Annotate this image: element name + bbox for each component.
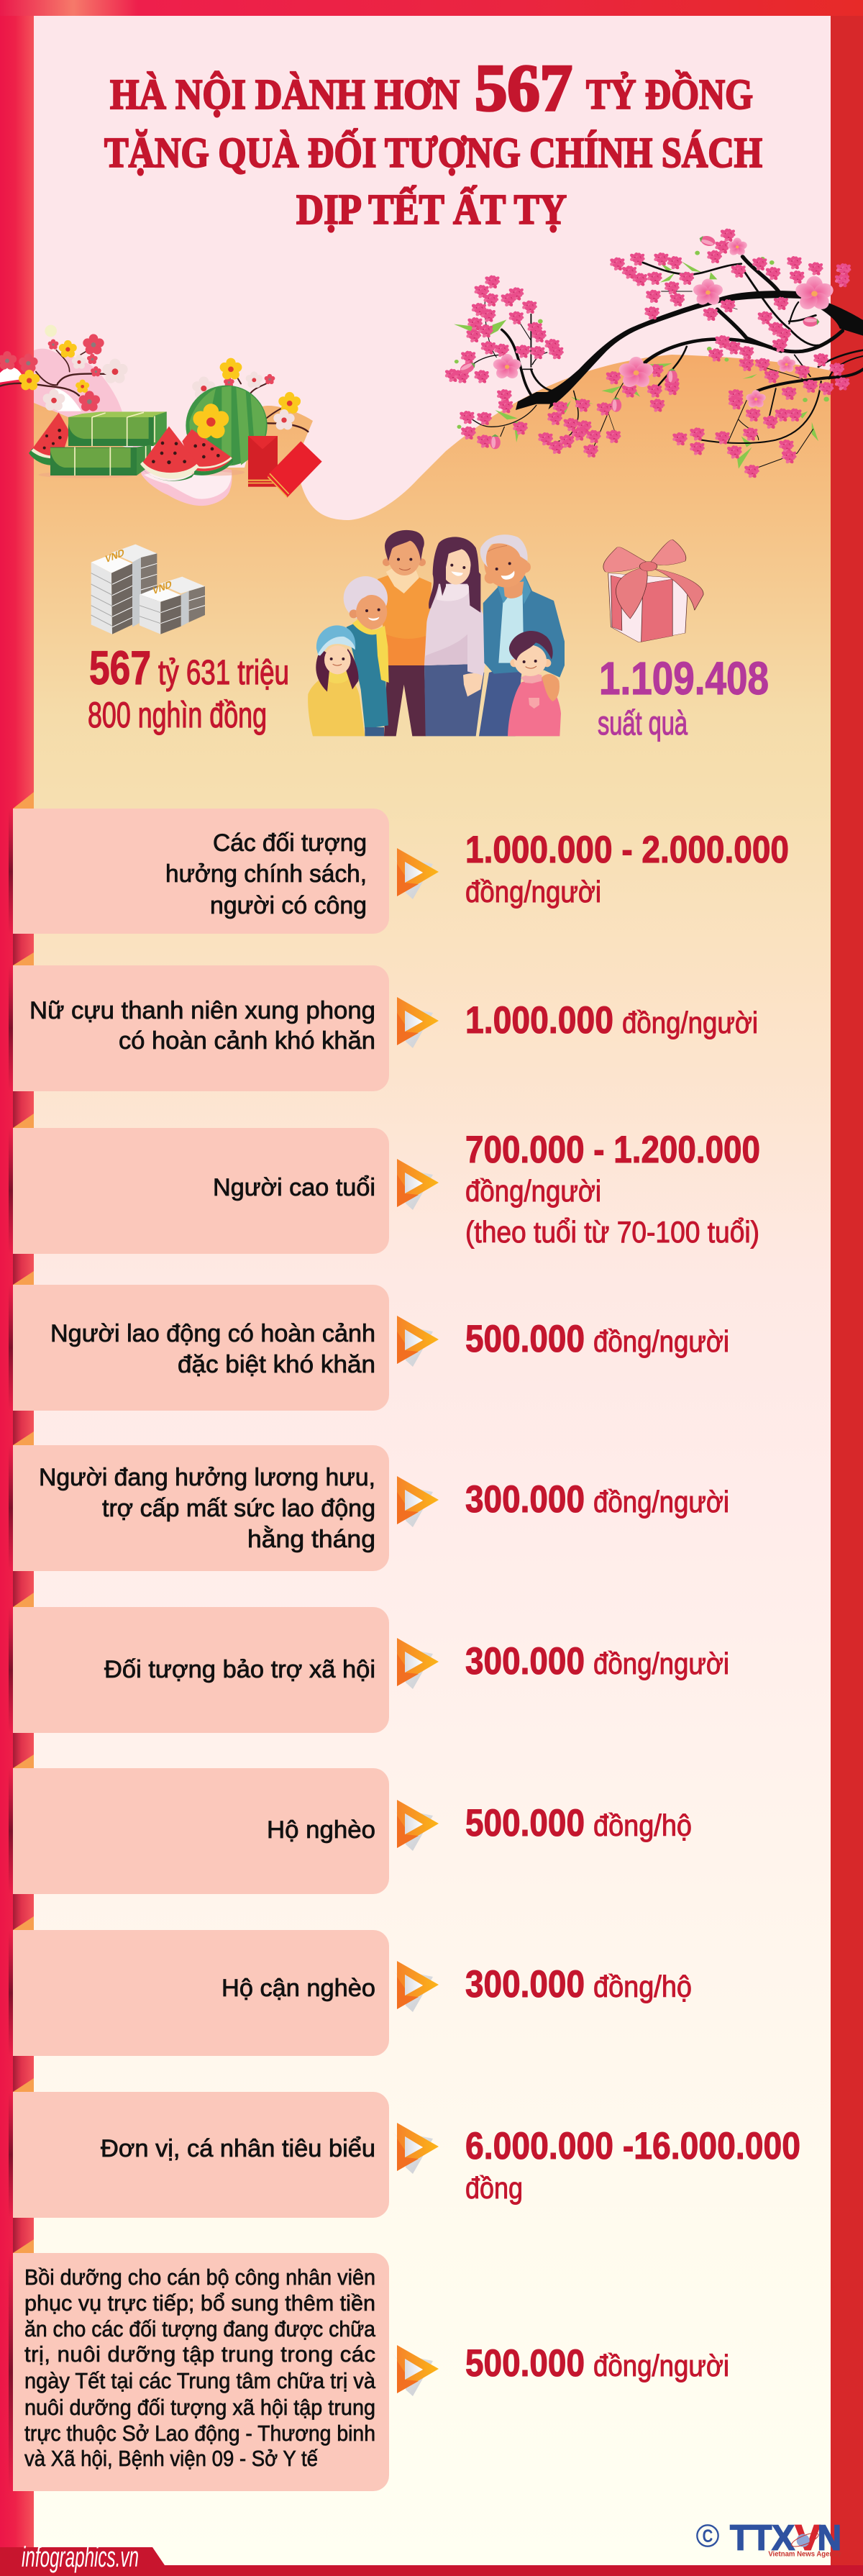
row 5: hằng tháng: [247, 1526, 375, 1553]
row 1: 1.000.000 - 2.000.000: [465, 829, 789, 871]
row 10: ăn cho các đối tượng đang được chữa: [24, 2316, 376, 2341]
row 3: (theo tuổi từ 70-100 tuổi): [465, 1215, 759, 1249]
row 5: [9, 1432, 729, 1607]
stat: total money: tỷ 631 triệu: [158, 654, 289, 692]
title: [104, 51, 762, 233]
red envelopes: [248, 436, 322, 498]
logo: TTXVN: N: [818, 2518, 841, 2557]
girl: [308, 625, 365, 736]
illustration: family: [308, 530, 565, 736]
icon: VND money stacks: VND: [105, 547, 124, 565]
row 3: [9, 1114, 760, 1285]
row 3: Người cao tuổi: [213, 1174, 375, 1201]
watermelon: [186, 386, 268, 466]
row 4: Người lao động có hoàn cảnh: [50, 1320, 375, 1347]
row 8: 300.000: [465, 1963, 585, 2006]
row 2: [9, 952, 758, 1128]
row 10: 500.000: [465, 2342, 585, 2385]
row 7: 500.000: [465, 1802, 585, 1844]
row 2: đồng/người: [622, 1006, 758, 1039]
row 10: [9, 2239, 729, 2491]
grandpa: [479, 534, 565, 736]
row 1: [9, 792, 789, 965]
row 2: Nữ cựu thanh niên xung phong: [29, 997, 375, 1024]
row 10: ngày Tết tại các Trung tâm chữa trị và: [24, 2368, 376, 2393]
woman: [424, 537, 490, 736]
row 4: đồng/người: [593, 1324, 729, 1358]
logo: TTXVN: [697, 2518, 841, 2558]
row 7: đồng/hộ: [593, 1808, 692, 1842]
footer bar: [0, 2541, 863, 2576]
row 4: 500.000: [465, 1318, 585, 1360]
stat: gift count: 1.109.408: [599, 652, 769, 704]
footer bar: infographics.vn: [22, 2541, 139, 2573]
row 10: và Xã hội, Bệnh viện 09 - Sở Y tế: [24, 2446, 318, 2471]
row 8: [9, 1916, 692, 2092]
row 2: có hoàn cảnh khó khăn: [119, 1027, 375, 1055]
stat: gift count: suất quà: [598, 704, 688, 742]
row 1: Các đối tượng: [213, 829, 367, 857]
row 9: 6.000.000 -16.000.000: [465, 2125, 800, 2167]
row 5: Người đang hưởng lương hưu,: [39, 1464, 375, 1491]
illustration: Tet food and red envelopes: [0, 325, 322, 498]
row 10: trị, nuôi dưỡng tập trung trong các: [24, 2341, 375, 2367]
row 9: đồng: [465, 2171, 523, 2205]
row 5: trợ cấp mất sức lao động: [102, 1495, 375, 1522]
row 6: [9, 1593, 729, 1768]
row 5: 300.000: [465, 1478, 585, 1521]
row 10: phục vụ trực tiếp; bổ sung thêm tiền: [24, 2290, 375, 2316]
row 5: đồng/người: [593, 1485, 729, 1519]
left border: [0, 0, 34, 2576]
row 4: đặc biệt khó khăn: [178, 1351, 375, 1378]
row 7: [9, 1754, 692, 1930]
title: DỊP TẾT ẤT TỴ: [296, 186, 567, 233]
row 6: 300.000: [465, 1640, 585, 1683]
row 1: người có công: [210, 892, 367, 919]
boy: [508, 631, 561, 736]
logo: TTXVN: C: [703, 2526, 713, 2547]
row 1: đồng/người: [465, 875, 601, 909]
banh chung lower: [50, 445, 151, 475]
illustration: peach blossom branch: [442, 227, 863, 478]
row 10: nuôi dưỡng đối tượng xã hội tập trung: [24, 2395, 375, 2420]
row 10: đồng/người: [593, 2349, 729, 2382]
icon: VND money stacks: [91, 545, 205, 634]
row 6: đồng/người: [593, 1647, 729, 1680]
row 6: Đối tượng bảo trợ xã hội: [104, 1656, 375, 1683]
row 4: [9, 1271, 729, 1445]
top border: [0, 0, 863, 16]
row 10: trực thuộc Sở Lao động - Thương binh: [24, 2421, 375, 2446]
watermelon slice back: [29, 412, 70, 465]
banh chung upper: [68, 411, 167, 446]
logo: TTXVN: Vietnam News Agency: [768, 2550, 841, 2558]
icon: VND money stacks: VND: [152, 578, 172, 597]
row 1: hưởng chính sách,: [165, 860, 367, 888]
stat: total money: [88, 641, 289, 735]
stat: total money: 800 nghìn đồng: [88, 695, 267, 735]
row 2: 1.000.000: [465, 999, 613, 1042]
watermelon slices front: [140, 427, 233, 481]
man: [378, 530, 432, 736]
row 8: đồng/hộ: [593, 1970, 692, 2003]
row 10: Bồi dưỡng cho cán bộ công nhân viên: [24, 2265, 375, 2290]
title: TẶNG QUÀ ĐỐI TƯỢNG CHÍNH SÁCH: [104, 129, 762, 176]
right border: [831, 0, 863, 2576]
row 8: Hộ cận nghèo: [222, 1975, 375, 2002]
title: 567: [475, 51, 572, 124]
row 3: đồng/người: [465, 1174, 601, 1208]
grandma: [344, 576, 389, 736]
logo: TTXVN: TTX: [730, 2518, 795, 2557]
row 9: Đơn vị, cá nhân tiêu biểu: [101, 2135, 375, 2162]
row 3: 700.000 - 1.200.000: [465, 1129, 760, 1171]
title: HÀ NỘI DÀNH HƠN: [110, 70, 460, 118]
row 9: [9, 2078, 800, 2253]
stat: total money: 567: [89, 641, 151, 694]
logo: TTXVN: V: [795, 2518, 821, 2557]
icon: gift box: [603, 540, 703, 642]
title: TỶ ĐỒNG: [586, 70, 753, 118]
stat: gift count: [598, 652, 769, 742]
row 7: Hộ nghèo: [267, 1816, 375, 1844]
